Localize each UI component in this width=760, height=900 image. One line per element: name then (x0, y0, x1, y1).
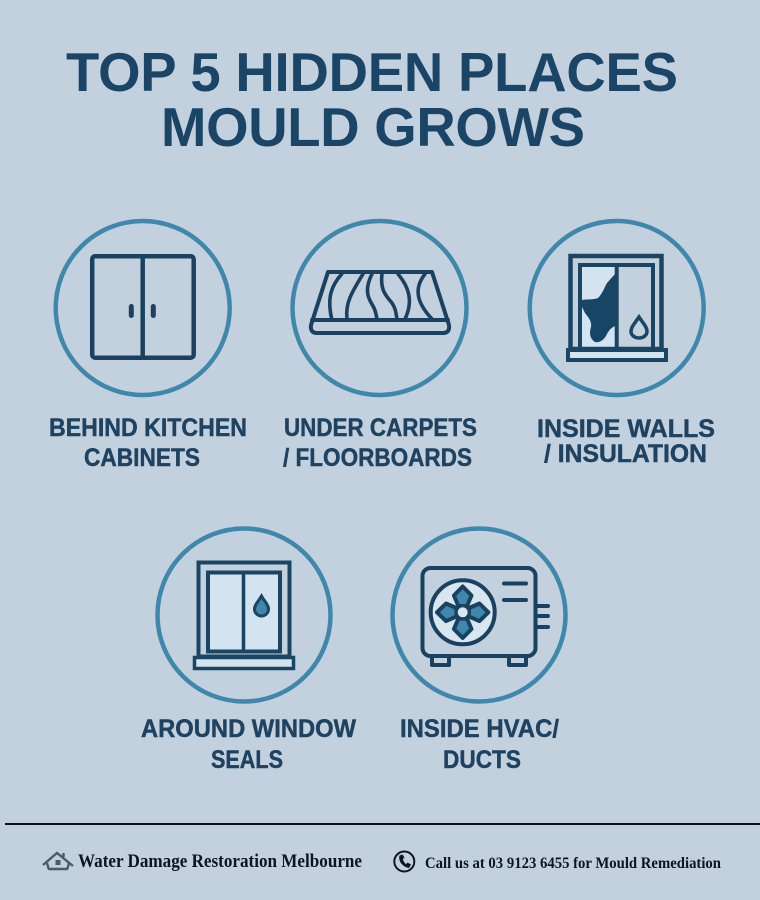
icon: house (43, 853, 73, 869)
title (66, 42, 678, 158)
label: under carpets: / FLOORBOARDS (283, 444, 472, 472)
icon: kitchen cabinet (56, 221, 230, 395)
label: under carpets (283, 414, 477, 472)
icon: hvac unit (392, 528, 566, 702)
label: inside walls: INSIDE WALLS (537, 415, 715, 443)
icon: window with droplet (158, 528, 330, 702)
label: inside hvac ducts (400, 715, 559, 774)
icon: phone (394, 852, 414, 872)
icon: carpet (292, 221, 466, 395)
panel: around window seals (141, 528, 356, 774)
label: around window seals: AROUND WINDOW (141, 715, 356, 743)
title: TOP 5 HIDDEN PLACES (66, 42, 678, 103)
footer: company name: Water Damage Restoration Melbourne (78, 852, 362, 872)
label: around window seals (141, 715, 356, 774)
footer: phone contact: Call us at 03 9123 6455 for Mould Remediation (425, 855, 721, 872)
label: around window seals: SEALS (211, 746, 283, 774)
title: MOULD GROWS (161, 97, 585, 158)
label: inside hvac ducts: DUCTS (443, 746, 521, 774)
label: inside walls: / INSULATION (544, 440, 707, 468)
label: behind kitchen cabinets: BEHIND KITCHEN (49, 414, 247, 442)
panel: behind kitchen cabinets (49, 221, 247, 472)
panel: inside hvac ducts (392, 528, 566, 774)
label: inside hvac ducts: INSIDE HVAC/ (400, 715, 559, 743)
panel: inside walls (530, 221, 715, 468)
label: behind kitchen cabinets (49, 414, 247, 472)
label: inside walls (537, 415, 715, 468)
label: behind kitchen cabinets: CABINETS (84, 444, 200, 472)
panel: under carpets (283, 221, 477, 472)
icon: window with mould (530, 221, 704, 395)
label: under carpets: UNDER CARPETS (284, 414, 477, 442)
